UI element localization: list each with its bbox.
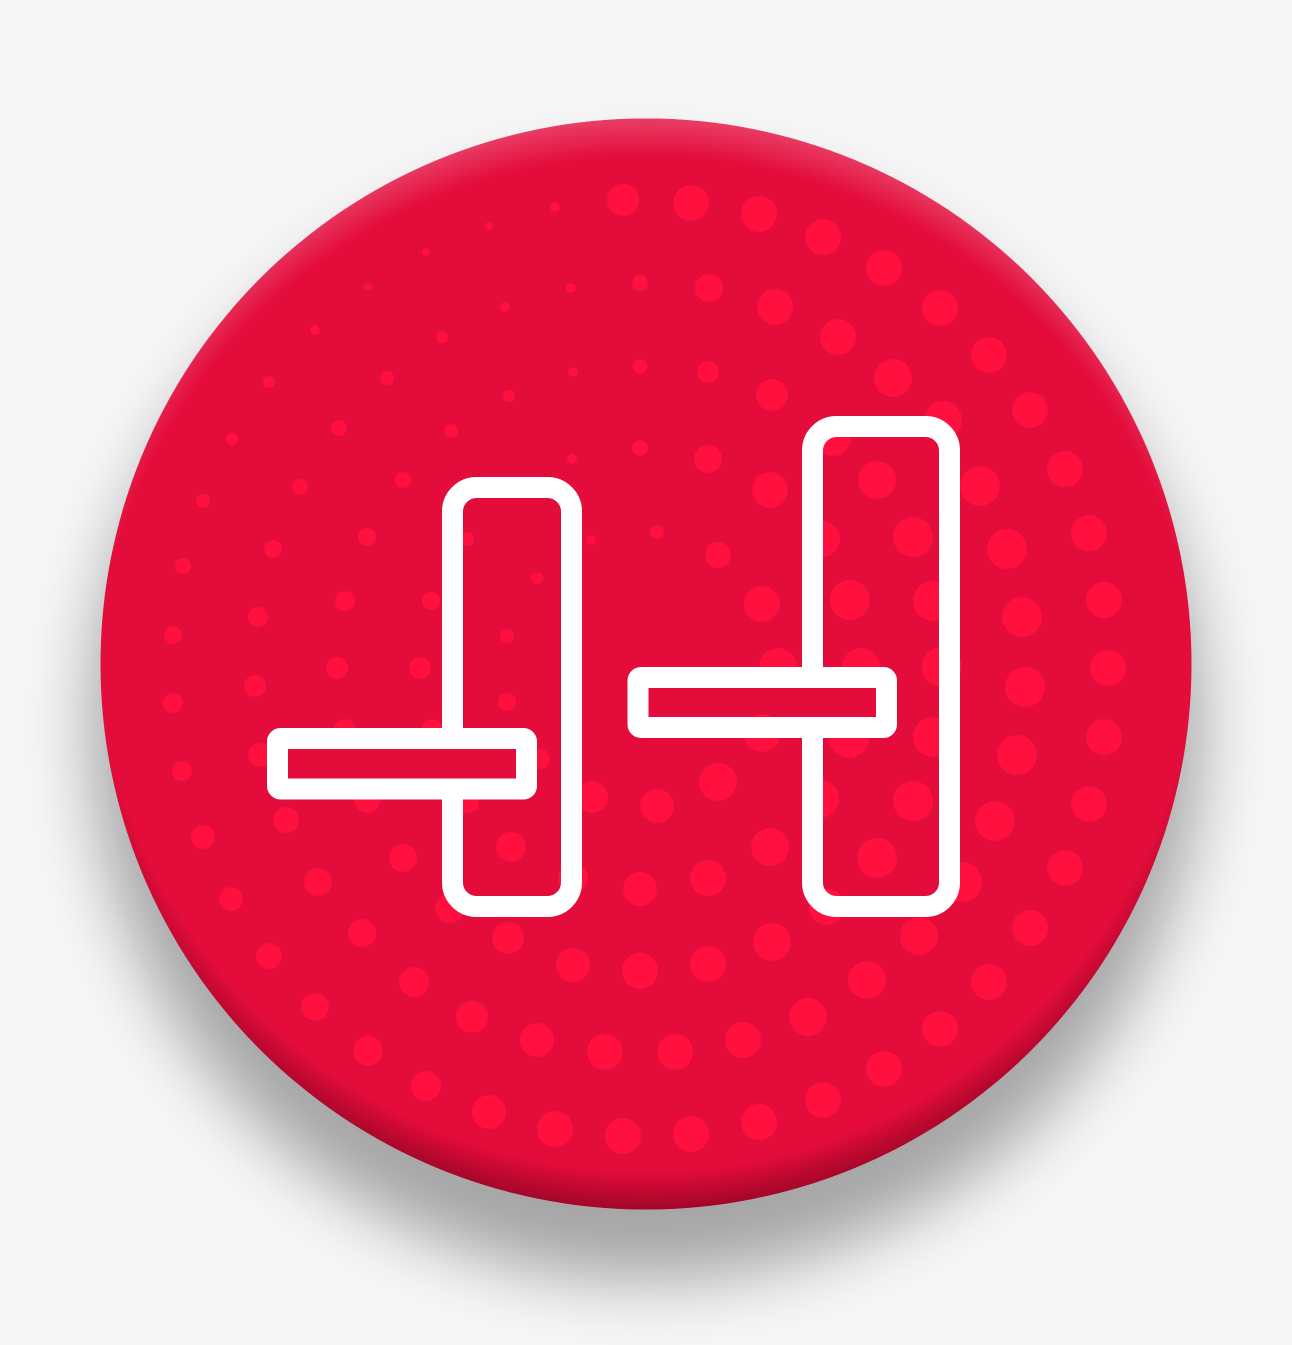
right tall bar bbox=[812, 426, 950, 906]
disc rim shading bbox=[100, 118, 1192, 1210]
halftone dot pattern bbox=[163, 184, 1126, 1154]
left horizontal bar bbox=[278, 738, 526, 789]
red disc bbox=[100, 118, 1192, 1210]
right horizontal bar bbox=[638, 678, 886, 728]
left tall bar bbox=[452, 488, 572, 906]
drop shadow bbox=[90, 169, 1202, 1281]
icon: align bars bbox=[278, 426, 950, 906]
